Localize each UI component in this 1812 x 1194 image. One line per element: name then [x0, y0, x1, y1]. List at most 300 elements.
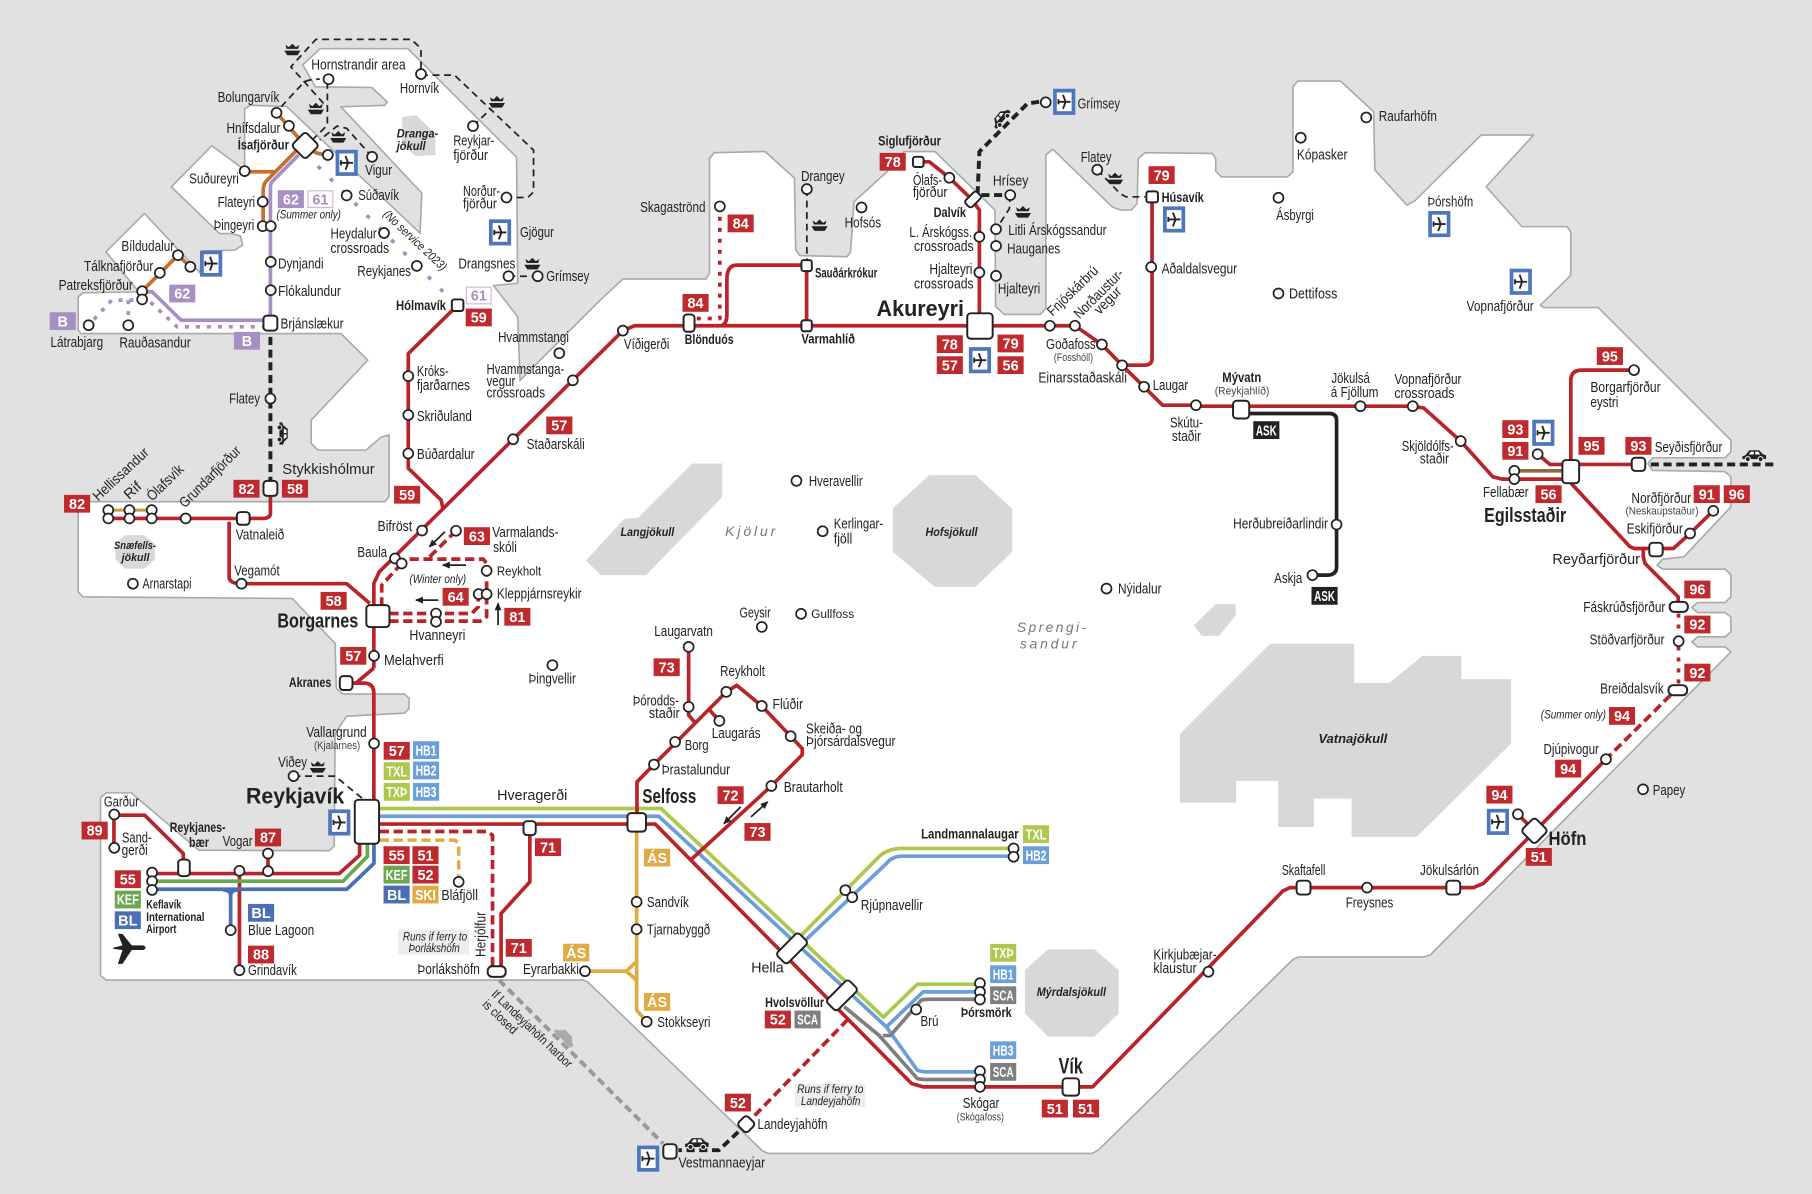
bus routes north and east — [379, 162, 1713, 1087]
hub: Hella — [776, 932, 808, 965]
route badge numbers: HB2 — [1026, 848, 1046, 864]
labels: Highlands: Laugarás — [712, 726, 761, 742]
labels: West: (Kjalarnes) — [314, 740, 360, 752]
glaciers — [116, 115, 1511, 1037]
labels: West: Melahverfi — [384, 653, 444, 669]
labels: Highlands: Laugarvatn — [654, 624, 713, 640]
labels: West: Þingvellir — [528, 671, 576, 687]
hub: Akureyri — [967, 313, 993, 339]
route badge numbers: TXL — [386, 764, 407, 780]
labels: Northeast and East: Djúpivogur — [1544, 742, 1599, 758]
route badge numbers: 61 — [471, 289, 487, 305]
labels: Westfjords: Flókalundur — [278, 284, 341, 300]
labels: South: Mýrdalsjökull — [1037, 985, 1107, 999]
labels: Highlands: Reykholt — [720, 664, 765, 680]
grey SCA line — [844, 999, 980, 1079]
red spur lines — [501, 835, 530, 967]
airport icon: Bíldudalur — [202, 252, 220, 275]
route badge numbers: SKI — [415, 888, 436, 904]
badge: KEF green — [115, 866, 410, 908]
labels: Highlands: Þórodds- — [633, 693, 679, 709]
airport icon: Egilsstaðir — [1534, 422, 1553, 444]
route badge numbers: TXL — [1026, 827, 1047, 843]
route badge numbers: HB3 — [993, 1043, 1014, 1059]
labels: West: Hellissandur — [90, 445, 153, 505]
route badge numbers: B — [58, 314, 68, 330]
route badge numbers: 93 — [1630, 439, 1646, 455]
hub: Vík — [1063, 1078, 1079, 1096]
labels: Southwest: Garður — [104, 795, 139, 811]
labels: Southwest: Vogar — [223, 834, 253, 850]
labels: North: Víðigerði — [624, 337, 669, 353]
labels: Northeast and East: Stöðvarfjörður — [1590, 632, 1665, 648]
labels: Westfjords: Rauðasandur — [119, 336, 191, 352]
route badge numbers: ÁS — [647, 994, 667, 1011]
route badge numbers: 51 — [1078, 1102, 1094, 1118]
route badge numbers: ÁS — [566, 945, 587, 962]
labels: North: Grímsey — [1078, 96, 1121, 112]
route 82 / 58 — [108, 497, 370, 603]
labels: South: Skaftafell — [1282, 863, 1325, 879]
labels: North: Skagaströnd — [640, 200, 706, 216]
labels: Westfjords: Hornvík — [400, 81, 440, 97]
labels: Westfjords: Króks- — [417, 364, 449, 380]
labels: Westfjords: Patreksfjörður — [59, 278, 133, 294]
labels: West: Arnarstapi — [142, 576, 191, 592]
airport icon: Vopnafjörður — [1512, 271, 1530, 293]
labels: Westfjords: Hornstrandir area — [311, 57, 406, 73]
Reykjanes lines — [114, 815, 360, 970]
hub: Blönduós — [684, 314, 695, 332]
labels: Northeast and East: Vopnafjörður — [1467, 299, 1534, 315]
route badge numbers: 71 — [511, 941, 527, 957]
route badge numbers: 56 — [1003, 358, 1019, 374]
route badge numbers: 88 — [253, 948, 269, 964]
bus routes south — [114, 647, 1013, 1124]
route badge numbers: 51 — [417, 848, 434, 864]
labels: Southwest: Þorlákshöfn — [417, 962, 480, 978]
labels: South: Freysnes — [1346, 896, 1393, 912]
labels: Southwest: bær — [189, 834, 210, 850]
labels: Northeast and East: staðir — [1420, 452, 1449, 468]
lilac dotted routes — [318, 166, 445, 294]
labels: Southwest: Bláfjöll — [441, 888, 478, 904]
labels: North: Sauðárkrókur — [815, 264, 878, 280]
labels: West: Búðardalur — [417, 447, 475, 463]
ferry icons — [284, 44, 1123, 773]
route badge numbers: 51 — [1047, 1102, 1063, 1118]
labels: Southwest: Blue Lagoon — [248, 923, 314, 939]
labels: Highlands: Hofsjökull — [926, 525, 978, 539]
labels: Westfjords: Gjögur — [520, 225, 554, 241]
labels: West: Borgarnes — [277, 611, 358, 633]
labels: Southwest: If Landeyjahöfn harbor — [489, 986, 576, 1071]
labels: North: Litli Árskógssandur — [1008, 222, 1107, 239]
route badge numbers: HB3 — [416, 785, 436, 801]
labels: North: fjörður — [913, 185, 948, 201]
orange routes — [142, 113, 328, 291]
route badge numbers: 56 — [1540, 487, 1557, 503]
route badge numbers: BL — [118, 913, 138, 929]
labels: Northeast and East: Höfn — [1549, 828, 1586, 850]
route badge numbers: 51 — [1531, 850, 1547, 866]
route badge numbers: 58 — [326, 594, 342, 610]
labels: Westfjords: Brjánslækur — [280, 317, 344, 333]
labels: Westfjords — [51, 57, 590, 407]
badge: SCA grey — [794, 986, 1016, 1081]
route badge numbers: 64 — [448, 590, 464, 606]
labels: Highlands: Skeiða- og — [806, 722, 862, 738]
labels: North: Hauganes — [1007, 241, 1060, 257]
labels: Westfjords: fjörður — [463, 196, 497, 212]
airport icon: Akureyri — [971, 349, 989, 371]
hub: Jökulsárlón — [1446, 881, 1460, 895]
badge: HB light blue — [413, 741, 1049, 1059]
labels: South: Vestmannaeyjar — [678, 1156, 765, 1172]
labels: Southwest: Herjólfur — [474, 912, 490, 957]
route badge numbers: 58 — [287, 482, 303, 498]
route badge numbers: SCA — [993, 988, 1014, 1004]
labels: North: Hofsós — [845, 215, 881, 231]
labels: Westfjords: Ísafjörður — [238, 136, 289, 152]
route badge numbers: 96 — [1689, 583, 1705, 599]
labels: Southwest: is closed — [480, 997, 521, 1037]
labels: West: Vatnaleið — [236, 527, 284, 543]
labels: North: Norðaustur- — [1071, 266, 1127, 322]
ferry routes (thin dashed) — [281, 39, 1145, 800]
glacier: Hofsjökull — [893, 475, 1012, 587]
labels: South: Hvolsvöllur — [765, 994, 825, 1010]
labels: Northeast and East: Vatnajökull — [1318, 731, 1388, 746]
hub: Selfoss — [627, 813, 646, 832]
labels: North: crossroads — [914, 276, 974, 292]
route badge numbers: 91 — [1699, 487, 1715, 503]
route badge numbers: HB1 — [993, 967, 1014, 983]
labels: Highlands: Brautarholt — [784, 780, 843, 796]
labels: Northeast and East: Breiðdalsvík — [1600, 681, 1664, 697]
labels: North: Húsavík — [1162, 189, 1204, 205]
hub: Skaftafell — [1297, 881, 1310, 895]
route badge numbers: 59 — [471, 311, 487, 327]
route badge numbers: 95 — [1583, 439, 1600, 455]
labels: Southwest: Keflavík — [146, 900, 182, 912]
route badge numbers: 78 — [942, 337, 958, 353]
route badge numbers: HB1 — [416, 743, 436, 759]
airport icon: Vestmannaeyjar — [639, 1147, 657, 1170]
labels: West: (Winter only) — [409, 572, 466, 586]
route badge numbers: 94 — [1491, 788, 1507, 804]
labels: Highlands: Selfoss — [642, 786, 696, 808]
route badge numbers: 89 — [87, 824, 103, 840]
airport icon: Gjögur — [491, 221, 509, 244]
route badge numbers: 92 — [1689, 666, 1705, 682]
labels: Northeast and East: Reyðarfjörður — [1552, 552, 1640, 568]
labels: Highlands: Hveravellir — [809, 474, 863, 490]
labels: West: Vegamót — [234, 564, 280, 580]
labels: Northeast and East: Norðfjörður — [1631, 491, 1691, 507]
minor stops — [84, 69, 1718, 1092]
labels: Westfjords: Grímsey — [546, 269, 590, 285]
labels: South: Kirkjubæjar- — [1153, 948, 1217, 964]
labels: Southwest: Þorlákshöfn — [409, 941, 460, 955]
route badge numbers: 73 — [659, 660, 675, 676]
glacier: Drangajökull — [402, 115, 435, 156]
labels: Westfjords: Dranga- — [397, 127, 438, 141]
car ferry routes (thick dashed) — [270, 102, 1774, 1150]
hub: Hvolsvöllur — [826, 979, 858, 1012]
car icons — [277, 107, 1766, 1150]
hub: Þorlákshöfn — [488, 966, 506, 977]
labels: South: Landmannalaugar — [921, 826, 1019, 842]
labels: Highlands: fjöll — [834, 531, 852, 547]
labels: Northeast and East: Ásbyrgi — [1276, 207, 1314, 224]
hub: Stykkishólmur — [263, 481, 277, 496]
glacier: Vatnajökull — [1180, 644, 1511, 837]
labels: West: Snæfells- — [114, 540, 156, 552]
airport icon: Grímsey — [1055, 91, 1073, 113]
labels: North — [624, 96, 1237, 445]
labels: Northeast and East: Jökulsá — [1331, 371, 1370, 387]
route badge numbers: 96 — [1729, 487, 1745, 503]
labels: West: Kleppjárnsreykir — [497, 587, 582, 603]
hub: Reykjavík — [355, 800, 379, 844]
note backgrounds — [398, 930, 865, 1107]
route badge numbers: 84 — [733, 217, 749, 233]
labels: Westfjords: Dynjandi — [278, 256, 324, 272]
badge: olive — [384, 762, 1049, 962]
route badge numbers: SCA — [797, 1013, 818, 1029]
labels: North: Hjalteyri — [929, 262, 972, 278]
route badge numbers: 55 — [120, 872, 136, 888]
labels: Highlands: Kjölur — [725, 523, 777, 539]
labels: Highlands: Sprengi- — [1017, 619, 1087, 635]
labels: Westfjords: (No service 2023) — [380, 207, 450, 274]
route badge numbers: 93 — [1507, 422, 1523, 438]
airport icon: Höfn — [1489, 811, 1507, 833]
labels: North: Aðaldalsvegur — [1162, 261, 1237, 277]
olive line — [379, 808, 1013, 1017]
hub: Mývatn — [1233, 401, 1249, 418]
route 59 — [408, 305, 458, 508]
labels: Westfjords: Bíldudalur — [121, 239, 174, 255]
hub: Vestmannaeyjar — [663, 1144, 677, 1159]
labels: West: Vallargrund — [306, 725, 367, 741]
labels: North: Laugar — [1153, 378, 1188, 394]
hub: Ísafjörður — [291, 132, 319, 159]
labels: Highlands — [497, 474, 1162, 808]
labels: Highlands: Flúðir — [773, 697, 803, 713]
labels: West: Skriðuland — [417, 409, 472, 425]
labels: Southwest: Runs if ferry to — [403, 930, 467, 944]
badge: ASK black — [1253, 421, 1279, 439]
route 84 — [694, 217, 720, 318]
labels: Westfjords: vegur — [487, 374, 516, 390]
labels: West: Staðarskáli — [527, 437, 585, 453]
labels: Northeast and East: Vopnafjörður — [1394, 372, 1462, 388]
labels: North: (Fosshóll) — [1054, 352, 1093, 364]
labels: Southwest: Tjarnabyggð — [647, 923, 710, 939]
route badge numbers: 82 — [69, 497, 85, 513]
route badge numbers: BL — [387, 888, 406, 904]
labels: South: Jökulsárlón — [1420, 863, 1479, 879]
badge: lilac 62 and 61 — [278, 190, 304, 208]
labels: Highlands: Kerlingar- — [834, 517, 883, 533]
labels: North: Varmahlíð — [801, 330, 855, 346]
labels: South: Skógar — [963, 1096, 1000, 1112]
labels: West: Baula — [357, 545, 387, 561]
hub: Sauðárkrókur — [801, 260, 812, 271]
labels: North: Drangey — [801, 169, 845, 185]
hub: Varmahlíð — [801, 320, 812, 331]
labels: Southwest — [104, 795, 710, 1071]
labels: Highlands: Þjórsárdalsvegur — [806, 734, 896, 750]
route badge numbers: BL — [251, 906, 271, 922]
labels: West: Hvanneyri — [409, 628, 465, 644]
labels: West: Viðey — [278, 755, 308, 771]
labels: Westfjords: Látrabjarg — [51, 335, 103, 351]
route badge numbers: TXÞ — [993, 946, 1014, 962]
labels: Southwest: Sand- — [122, 831, 152, 847]
labels: West: Akranes — [289, 674, 332, 690]
route badge numbers: ASK — [1256, 423, 1277, 439]
labels: West: Bifröst — [378, 519, 412, 535]
route badge numbers: 62 — [283, 192, 299, 208]
labels: North: Flatey — [1081, 150, 1112, 166]
route badge numbers: 84 — [688, 296, 704, 312]
labels: Northeast and East: Herðubreiðarlindir — [1233, 516, 1328, 532]
icon: large plane at Keflavík — [113, 934, 146, 964]
light blue line — [379, 816, 1013, 1072]
labels: South: Rjúpnavellir — [861, 898, 923, 914]
labels: Westfjords: Heydalur — [331, 227, 377, 243]
hub: Hólmavík — [452, 299, 463, 311]
labels: Southwest: Eyrarbakki — [523, 962, 579, 978]
labels: West: Rif — [121, 479, 145, 503]
hub: Seyðisfjörður — [1632, 458, 1645, 471]
labels: Northeast and East: (Reykjahlíð) — [1215, 385, 1269, 397]
labels: Northeast and East: Askja — [1274, 571, 1302, 587]
hub: Breiðdalsvík — [1668, 685, 1687, 695]
hub: Höfn — [1521, 817, 1548, 844]
labels: Westfjords: Flateyri — [218, 195, 255, 211]
badge: yellow — [412, 849, 670, 1011]
hub: Akranes — [340, 676, 352, 690]
glacier: Mýrdalsjökull — [1025, 949, 1119, 1037]
labels: Westfjords: Hólmavík — [396, 297, 446, 313]
labels: Northeast and East: eystri — [1590, 395, 1618, 411]
labels: North: staðir — [1172, 429, 1201, 445]
labels: Southwest: gerði — [122, 843, 148, 859]
glacier: small ice cap — [1194, 604, 1236, 636]
labels: Southwest: Grindavík — [248, 963, 298, 979]
labels: Westfjords: fjarðarnes — [417, 378, 470, 394]
labels: North: crossroads — [914, 239, 974, 255]
route badge numbers: SCA — [993, 1065, 1014, 1081]
route badge numbers: 92 — [1689, 618, 1705, 634]
labels: North: Skútu- — [1170, 415, 1203, 431]
labels: Northeast and East: (Summer only) — [1541, 708, 1606, 722]
route badge numbers: ASK — [1314, 589, 1335, 605]
labels: North: Dalvík — [934, 204, 966, 220]
labels: South: Brú — [920, 1014, 938, 1030]
labels: Highlands: Nýidalur — [1118, 582, 1162, 598]
labels: Northeast and East: á Fjöllum — [1331, 385, 1378, 401]
route badge numbers: 52 — [417, 868, 434, 884]
labels: Westfjords: crossroads — [487, 386, 545, 402]
labels: Southwest: Reykjanes- — [170, 819, 226, 835]
route badge numbers: 79 — [1003, 337, 1019, 353]
hub: Dalvík — [964, 190, 982, 208]
hub: Hveragerði — [523, 821, 536, 835]
labels: West: jökull — [120, 552, 150, 564]
route badge numbers: 95 — [1602, 349, 1618, 365]
airport icon: Þórshöfn — [1430, 213, 1449, 235]
route badge numbers: 91 — [1507, 444, 1523, 460]
yellow ÁS line — [585, 832, 647, 1022]
labels: North: Ólafs- — [913, 172, 942, 189]
route badge numbers: 55 — [389, 848, 405, 864]
labels: West: Reykjavík — [246, 784, 345, 809]
labels: South: Landeyjahöfn — [758, 1117, 828, 1133]
glacier: Snæfellsjökull — [116, 535, 155, 569]
labels: North: Goðafoss — [1046, 337, 1096, 353]
route badges: red — [64, 153, 1750, 1117]
labels: Northeast and East: Þórshöfn — [1428, 195, 1473, 211]
route badge numbers: B — [242, 334, 252, 350]
airport icon: Ísafjörður — [337, 152, 356, 174]
route badge numbers: 82 — [238, 482, 255, 498]
labels: Westfjords: Reykjar- — [453, 134, 494, 150]
hub: Vatnaleið — [237, 512, 250, 525]
lilac route 62 — [142, 155, 298, 320]
labels: Southwest: International — [146, 912, 204, 924]
direction arrows — [416, 532, 768, 824]
major stops and hubs — [178, 132, 1688, 1159]
labels: Northeast and East: Dettifoss — [1289, 287, 1337, 303]
labels: Westfjords: Tálknafjörður — [84, 259, 154, 275]
labels: North: Fnjóskárbrú — [1044, 263, 1102, 320]
labels: Southwest: Sandvík — [647, 895, 690, 911]
labels: Westfjords: Hvammstangi — [498, 330, 569, 346]
labels: West — [90, 409, 585, 809]
route badge numbers: KEF — [386, 868, 408, 884]
hub: Reyðarfjörður — [1649, 543, 1663, 556]
labels: South: Runs if ferry to — [797, 1082, 864, 1096]
labels: Northeast and East: Skjöldólfs- — [1402, 439, 1454, 455]
labels: North: vegur — [1091, 284, 1125, 318]
labels: Westfjords: fjörður — [453, 148, 488, 164]
airport icon: Reykjavík — [330, 811, 349, 834]
labels: Westfjords: jökull — [395, 139, 426, 153]
route badge numbers: 73 — [749, 825, 766, 841]
route badge numbers: HB2 — [416, 764, 436, 780]
labels: Northeast and East — [1215, 109, 1723, 850]
hub: Fáskrúðsfjörður — [1670, 602, 1688, 612]
labels: South: Hella — [751, 961, 784, 977]
route badge numbers: 94 — [1560, 762, 1576, 778]
labels: Highlands: Geysir — [739, 606, 771, 622]
labels: Northeast and East: Seyðisfjörður — [1655, 440, 1723, 456]
route badge numbers: 52 — [730, 1096, 746, 1112]
labels: Northeast and East: Borgarfjörður — [1590, 380, 1661, 396]
labels: Northeast and East: Fáskrúðsfjörður — [1583, 600, 1666, 616]
labels: Southwest: Stokkseyri — [657, 1015, 710, 1031]
bus routes west — [89, 113, 979, 800]
labels: North: Hjalteyri — [998, 281, 1040, 297]
labels: Westfjords: Hnífsdalur — [227, 121, 281, 137]
labels: South: klaustur — [1153, 961, 1197, 977]
route ASK — [1250, 413, 1337, 575]
